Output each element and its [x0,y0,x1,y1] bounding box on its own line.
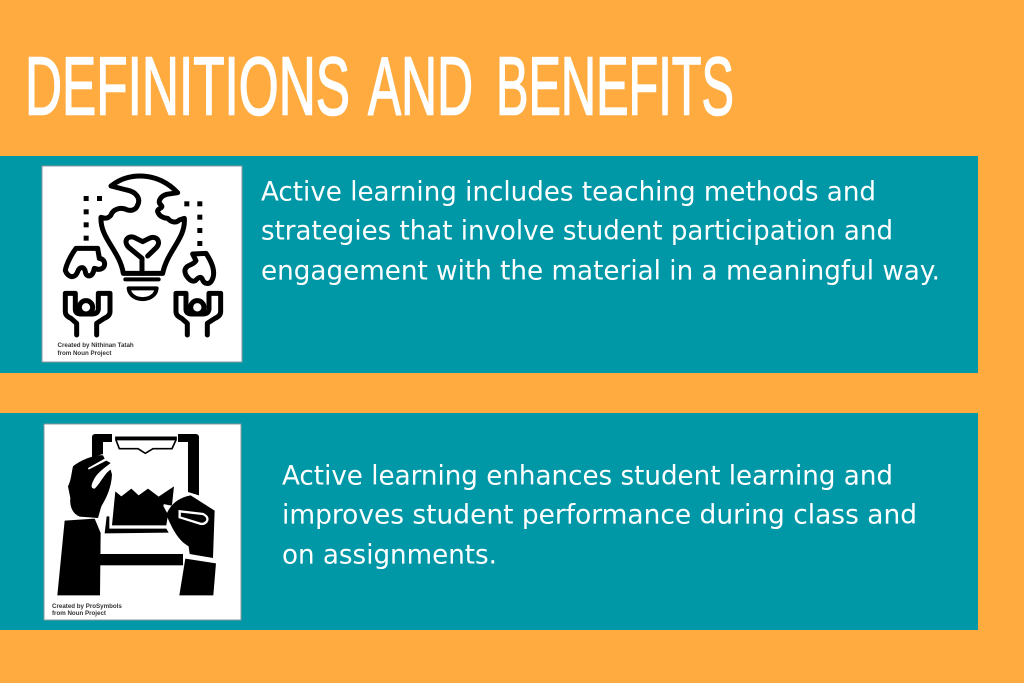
panel: benefits [0,413,978,630]
icon: lightbulb puzzle: from Noun Project [58,350,111,357]
title: BENEFITS [496,40,734,132]
icon: hands on clipboard [44,424,241,620]
icon: hands on clipboard: Created by ProSymbols [52,603,122,610]
text block: definition [261,176,940,286]
icon: lightbulb puzzle: Created by Nithinan Tatah [58,342,134,349]
panel: definition [0,156,978,373]
title: DEFINITIONS [25,40,350,132]
text block: benefits: on assignments. [282,540,497,570]
title: AND [368,40,473,132]
text block: benefits: Active learning enhances student learning and [282,460,893,492]
icon: hands on clipboard: from Noun Project [52,610,106,617]
text block: definition: engagement with the material in a meaningful way. [261,256,940,286]
text block: definition: strategies that involve student participation and [261,216,893,246]
text block: definition: Active learning includes teaching methods and [261,176,876,208]
icon: lightbulb puzzle [42,166,242,362]
text block: benefits [282,460,917,570]
text block: benefits: improves student performance during class and [282,500,917,530]
